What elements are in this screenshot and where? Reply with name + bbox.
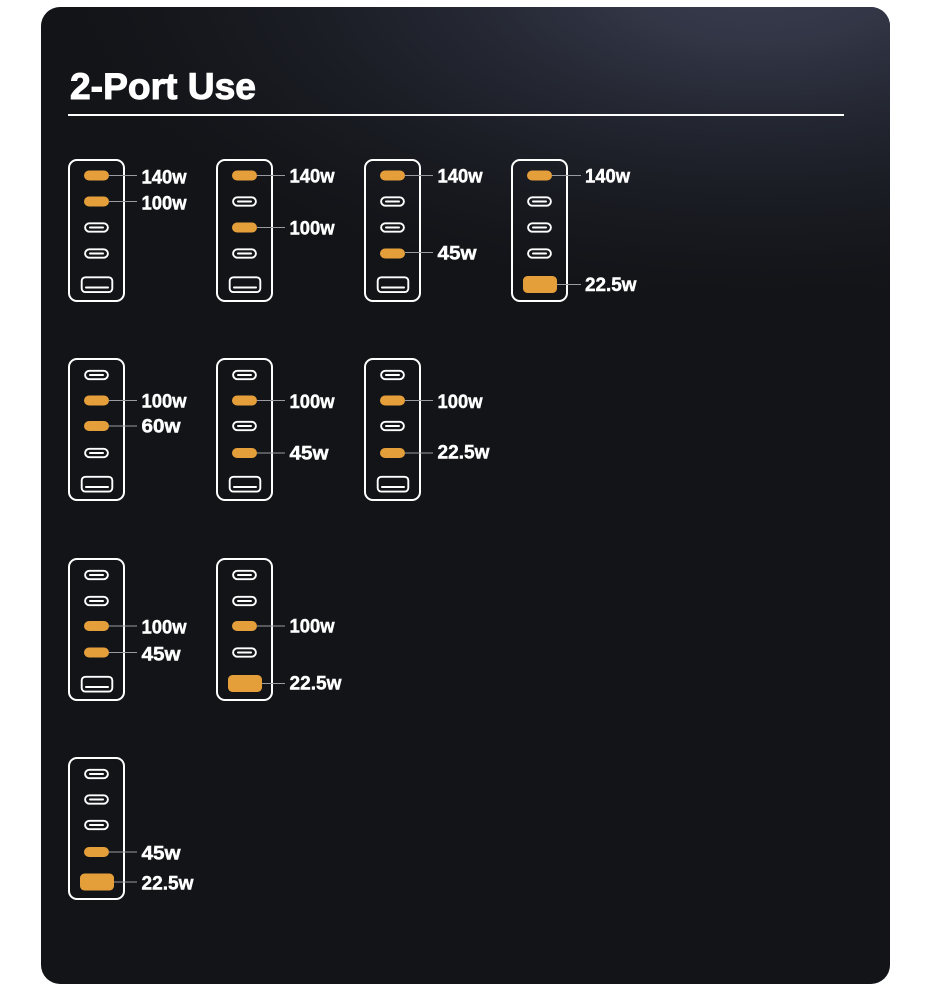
port diagram: 100w + 60w: 60w	[142, 416, 181, 438]
port diagram: 100w + 60w	[69, 359, 187, 500]
port diagram: 100w + 45w: 45w	[290, 444, 329, 464]
port diagram: 140w + 100w: 140w	[142, 168, 187, 188]
port diagram: 140w + 100w: 100w	[142, 194, 187, 214]
port diagram: 100w + 45w (lower ports): 100w	[142, 618, 187, 638]
port diagram: 45w + 22.5w: 45w	[142, 844, 181, 864]
port diagram: 100w + 60w: 100w	[142, 392, 187, 412]
port diagram: 100w + 22.5w (USB-A): 100w	[290, 616, 335, 638]
port diagram: 100w + 22.5w	[365, 359, 490, 500]
port diagram: 100w + 22.5w: 22.5w	[438, 442, 490, 464]
port diagram: 140w + 22.5w	[512, 160, 637, 301]
port diagram: 140w + 45w	[365, 160, 483, 301]
port diagram: 140w + 45w: 45w	[438, 244, 477, 264]
port diagram: 140w + 100w (third port)	[217, 160, 335, 301]
port diagram: 140w + 100w (third port): 140w	[290, 166, 335, 188]
port diagram: 140w + 100w	[69, 160, 187, 301]
port diagram: 100w + 45w	[217, 359, 335, 500]
port diagram: 140w + 100w (third port): 100w	[290, 218, 335, 240]
port diagram: 100w + 45w (lower ports)	[69, 559, 187, 700]
port diagram: 100w + 45w: 100w	[290, 392, 335, 413]
port diagram: 45w + 22.5w: 22.5w	[142, 874, 194, 894]
port diagram: 140w + 22.5w: 140w	[585, 166, 630, 188]
port diagram: 45w + 22.5w	[69, 758, 194, 899]
port diagram: 100w + 45w (lower ports): 45w	[142, 644, 181, 666]
port diagram: 140w + 45w: 140w	[438, 166, 483, 188]
title: 2-Port Use	[70, 66, 256, 107]
port diagram: 140w + 22.5w: 22.5w	[585, 275, 637, 296]
port diagram: 100w + 22.5w: 100w	[438, 392, 483, 413]
port diagram: 100w + 22.5w (USB-A): 22.5w	[290, 674, 342, 694]
title underline	[68, 114, 844, 116]
port diagram: 100w + 22.5w (USB-A)	[217, 559, 342, 700]
